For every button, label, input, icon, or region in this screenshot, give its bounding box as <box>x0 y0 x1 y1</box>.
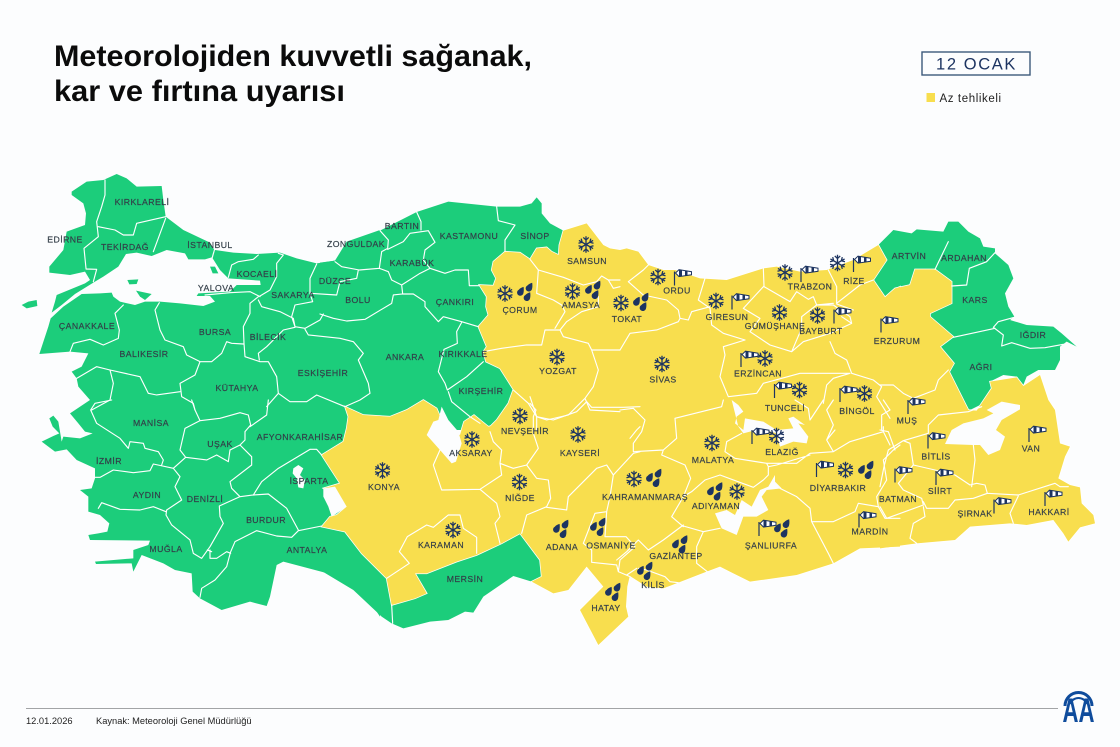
NİĞDE <box>505 474 535 503</box>
ÇORUM <box>497 283 538 315</box>
BİNGÖL: BİNGÖL <box>839 406 875 416</box>
UŞAK: UŞAK <box>207 439 233 449</box>
SAMSUN: SAMSUN <box>567 256 607 266</box>
SİVAS <box>649 356 677 384</box>
KASTAMONU: KASTAMONU <box>440 231 498 241</box>
İSTANBUL: İSTANBUL <box>187 240 233 250</box>
OSMANİYE: OSMANİYE <box>586 540 636 550</box>
MALATYA <box>692 435 734 465</box>
ÇANKIRI: ÇANKIRI <box>436 297 474 307</box>
ERZURUM: ERZURUM <box>874 336 920 346</box>
title <box>54 40 532 108</box>
BİTLİS <box>921 433 951 462</box>
EDİRNE: EDİRNE <box>47 234 83 244</box>
TRABZON: TRABZON <box>788 282 832 292</box>
SAMSUN <box>567 236 607 266</box>
ADIYAMAN: ADIYAMAN <box>692 501 740 511</box>
DÜZCE: DÜZCE <box>319 276 351 286</box>
GAZİANTEP: GAZİANTEP <box>649 551 703 561</box>
BİNGÖL <box>839 385 875 416</box>
ORDU: ORDU <box>663 286 691 296</box>
title: kar ve fırtına uyarısı <box>54 75 345 108</box>
YOZGAT: YOZGAT <box>539 366 577 376</box>
DİYARBAKIR: DİYARBAKIR <box>810 483 866 493</box>
AFYONKARAHİSAR: AFYONKARAHİSAR <box>257 432 343 442</box>
MUŞ <box>897 398 925 426</box>
ŞIRNAK <box>957 498 1011 518</box>
AMASYA <box>562 281 600 310</box>
HAKKARİ <box>1028 490 1070 517</box>
KAHRAMANMARAŞ <box>602 469 688 502</box>
KAHRAMANMARAŞ: KAHRAMANMARAŞ <box>602 492 688 502</box>
KIRIKKALE: KIRIKKALE <box>439 349 487 359</box>
ELAZIĞ <box>752 428 799 457</box>
KAYSERİ: KAYSERİ <box>560 448 600 458</box>
HATAY: HATAY <box>591 603 621 613</box>
YOZGAT <box>539 349 577 376</box>
KARS: KARS <box>962 295 988 305</box>
land: yellow provinces <box>322 223 1095 645</box>
ERZİNCAN: ERZİNCAN <box>734 368 782 378</box>
ADANA: ADANA <box>546 542 578 552</box>
MALATYA: MALATYA <box>692 455 734 465</box>
TEKİRDAĞ: TEKİRDAĞ <box>101 242 149 252</box>
land: green provinces <box>22 174 1077 628</box>
VAN: VAN <box>1022 444 1040 454</box>
KAYSERİ <box>560 426 600 458</box>
BİLECİK: BİLECİK <box>250 332 286 342</box>
OSMANİYE <box>586 518 636 550</box>
AKSARAY <box>449 431 493 458</box>
NEVŞEHİR: NEVŞEHİR <box>501 426 549 436</box>
AKSARAY: AKSARAY <box>449 448 493 458</box>
GAZİANTEP <box>649 535 703 561</box>
KARABÜK: KARABÜK <box>390 258 434 268</box>
ADIYAMAN <box>692 482 745 511</box>
BURDUR: BURDUR <box>246 515 286 525</box>
MARDİN: MARDİN <box>852 526 888 536</box>
TUNCELİ <box>765 382 808 413</box>
BATMAN <box>879 467 917 504</box>
lakes <box>293 400 1020 535</box>
GİRESUN: GİRESUN <box>706 312 748 322</box>
ORDU <box>650 269 692 296</box>
ŞANLIURFA <box>745 519 797 550</box>
KONYA: KONYA <box>368 482 400 492</box>
MANİSA: MANİSA <box>133 418 169 428</box>
GÜMÜŞHANE <box>745 304 805 331</box>
BALIKESİR: BALIKESİR <box>120 349 168 359</box>
footer source: Kaynak: Meteoroloji Genel Müdürlüğü <box>96 716 252 726</box>
SİİRT <box>928 469 953 496</box>
SİNOP: SİNOP <box>520 231 550 241</box>
legend: az tehlikeli: Az tehlikeli <box>940 93 1002 105</box>
TOKAT: TOKAT <box>612 314 642 324</box>
map of Turkey <box>22 174 1095 645</box>
TOKAT <box>612 293 648 324</box>
KONYA <box>368 462 400 492</box>
MUŞ: MUŞ <box>897 416 917 426</box>
KOCAELİ: KOCAELİ <box>237 269 277 279</box>
ARDAHAN: ARDAHAN <box>941 253 987 263</box>
ERZURUM <box>874 317 920 346</box>
logo: AA <box>1062 692 1094 730</box>
SİİRT: SİİRT <box>928 486 952 496</box>
KİLİS: KİLİS <box>641 580 665 590</box>
YALOVA: YALOVA <box>198 283 234 293</box>
TUNCELİ: TUNCELİ <box>765 403 805 413</box>
date box: 12 OCAK <box>936 56 1017 74</box>
RİZE: RİZE <box>843 276 865 286</box>
TRABZON <box>777 264 832 292</box>
ELAZIĞ: ELAZIĞ <box>765 447 799 457</box>
SAKARYA: SAKARYA <box>271 290 315 300</box>
ADANA <box>546 520 578 552</box>
IĞDIR: IĞDIR <box>1020 330 1046 340</box>
SİVAS: SİVAS <box>649 374 677 384</box>
HATAY <box>591 583 621 613</box>
KİLİS <box>637 562 665 590</box>
AĞRI: AĞRI <box>969 362 993 372</box>
KARAMAN: KARAMAN <box>418 540 464 550</box>
province labels and weather icons <box>47 197 1070 613</box>
VAN <box>1022 426 1046 454</box>
logo: AA: AA <box>1062 692 1094 730</box>
AYDIN: AYDIN <box>133 490 161 500</box>
ANKARA: ANKARA <box>386 352 424 362</box>
BARTIN: BARTIN <box>385 221 419 231</box>
AMASYA: AMASYA <box>562 300 600 310</box>
DİYARBAKIR <box>810 461 873 493</box>
KIRKLARELİ: KIRKLARELİ <box>115 197 169 207</box>
BURSA: BURSA <box>199 327 231 337</box>
NİĞDE: NİĞDE <box>505 493 535 503</box>
MUĞLA: MUĞLA <box>149 544 183 554</box>
İZMİR: İZMİR <box>96 456 122 466</box>
footer rule <box>26 708 1058 710</box>
BAYBURT <box>799 307 851 336</box>
date box <box>922 52 1030 75</box>
KÜTAHYA: KÜTAHYA <box>216 383 258 393</box>
title: Meteorolojiden kuvvetli sağanak, <box>54 40 532 73</box>
BİTLİS: BİTLİS <box>921 452 951 462</box>
DENİZLİ: DENİZLİ <box>187 494 223 504</box>
BOLU: BOLU <box>345 295 371 305</box>
ANTALYA: ANTALYA <box>287 545 327 555</box>
RİZE <box>829 255 870 286</box>
ARTVİN: ARTVİN <box>892 251 926 261</box>
province borders <box>70 180 1068 623</box>
BATMAN: BATMAN <box>879 494 917 504</box>
ZONGULDAK: ZONGULDAK <box>327 239 385 249</box>
NEVŞEHİR <box>501 408 549 436</box>
ESKİŞEHİR: ESKİŞEHİR <box>298 368 348 378</box>
ŞANLIURFA: ŞANLIURFA <box>745 540 797 550</box>
MERSİN: MERSİN <box>447 574 483 584</box>
İSPARTA: İSPARTA <box>290 476 328 486</box>
GÜMÜŞHANE: GÜMÜŞHANE <box>745 321 805 331</box>
KIRŞEHİR: KIRŞEHİR <box>459 386 503 396</box>
ŞIRNAK: ŞIRNAK <box>957 508 993 518</box>
ÇORUM: ÇORUM <box>502 305 538 315</box>
BAYBURT: BAYBURT <box>799 326 843 336</box>
HAKKARİ: HAKKARİ <box>1028 507 1070 517</box>
KARAMAN <box>418 522 464 550</box>
footer date: 12.01.2026 <box>26 716 73 726</box>
GİRESUN <box>706 293 749 322</box>
ÇANAKKALE: ÇANAKKALE <box>59 321 115 331</box>
MARDİN <box>852 512 888 536</box>
ERZİNCAN <box>734 350 782 378</box>
